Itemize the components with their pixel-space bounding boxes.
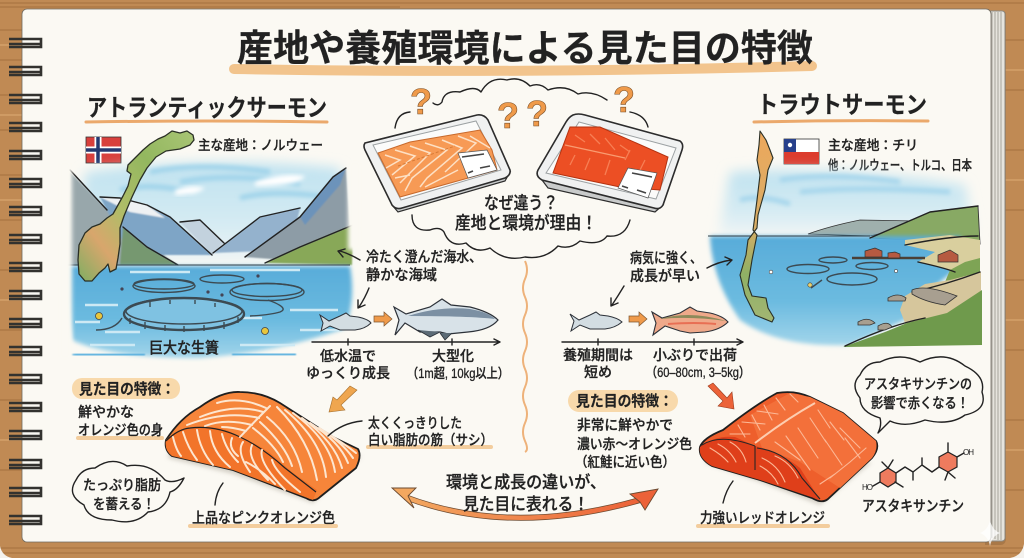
text: slow growth (306, 348, 390, 381)
icon: small salmon (570, 312, 622, 331)
panel: atlantic salmon heading: アトランティックサーモン (87, 95, 327, 122)
text: deep red to orange (575, 417, 692, 470)
text: chile origin: 主な産地：チリ (828, 137, 918, 153)
callout: elegant pink orange (190, 483, 336, 527)
callout: elegant pink orange: 上品なピンクオレンジ色 (192, 509, 335, 527)
text: norway origin: 主な産地：ノルウェー (198, 137, 323, 153)
text: environment and growth: 環境と成長の違いが、 (446, 472, 606, 492)
callout: thick white fat lines (328, 415, 493, 448)
speech bubble: astaxanthin effect: アスタキサンチンの (864, 376, 972, 392)
icon: arrow (629, 312, 647, 326)
diagram: astaxanthin molecule: HO (862, 483, 873, 492)
text: deep red to orange: 濃い赤〜オレンジ色 (577, 436, 692, 452)
rocks (858, 288, 957, 330)
text: why different: なぜ違う？ (484, 193, 558, 213)
speech bubble: astaxanthin effect (855, 357, 983, 433)
diagram: astaxanthin molecule: OH (963, 448, 974, 457)
icon: large salmon (394, 299, 498, 340)
fat stripes: cut face (173, 430, 300, 492)
question marks: ? (613, 79, 635, 120)
text: vivid orange flesh (78, 404, 163, 438)
callout: thick white fat lines: 白い脂肪の筋（サシ） (368, 432, 493, 448)
label: left appearance features: 見た目の特徴： (79, 380, 175, 398)
illustration: atlantic salmon fillet (166, 392, 362, 503)
arrow: orange pointing to fillet (329, 386, 357, 412)
text: vivid orange flesh: 鮮やかな (78, 404, 134, 420)
text: grows large: 大型化 (432, 348, 474, 364)
text: why different (455, 193, 597, 233)
curved double arrow (392, 488, 658, 518)
illustration: trout salmon fillet (700, 392, 877, 505)
panel: trout salmon heading: トラウトサーモン (757, 92, 927, 119)
callout: cold clear seawater: 静かな海域 (366, 266, 437, 284)
wavy divider (523, 261, 527, 452)
label: giant pens: 巨大な生簀 (149, 338, 219, 357)
text: environment and growth (446, 472, 606, 514)
title: 産地や養殖環境による見た目の特徴 (237, 28, 813, 69)
illustration: trout salmon package (537, 114, 683, 212)
pier and buildings (852, 257, 925, 259)
speech bubble: stores lots of fat (72, 461, 184, 522)
text: why different: 産地と環境が理由！ (455, 213, 597, 233)
speech bubble: stores lots of fat: を蓄える！ (93, 496, 155, 512)
callout: powerful red orange: 力強いレッドオレンジ (700, 510, 825, 527)
icon: small salmon (320, 313, 371, 331)
label: right appearance features: 見た目の特徴： (576, 392, 673, 410)
icon: norway flag (86, 137, 121, 163)
illustration: norwegian fjord (58, 160, 362, 360)
callout: disease resistant fast growth (611, 250, 732, 306)
arrow: red pointing to fillet (708, 383, 734, 409)
icon: trout (652, 307, 728, 335)
fat stripes: top surface (187, 400, 270, 437)
illustration: chilean bay (708, 170, 982, 347)
diagram: astaxanthin molecule (862, 443, 974, 492)
fat stripes: right surface (253, 407, 356, 480)
text: slow growth: 低水温で (320, 348, 376, 364)
speech bubble: astaxanthin effect: 影響で赤くなる！ (871, 395, 969, 411)
soft edges (58, 160, 362, 360)
text: chile origin (828, 137, 972, 173)
speech bubble: stores lots of fat: たっぷり脂肪 (83, 477, 161, 493)
sparkle watermark (980, 520, 1000, 546)
growth axis (312, 339, 500, 345)
callout: powerful red orange (698, 481, 828, 527)
text: deep red to orange: 非常に鮮やかで (577, 417, 673, 433)
text: short period (563, 347, 633, 380)
growth diagram: atlantic (306, 299, 509, 381)
map: norway (78, 131, 194, 281)
right shore (905, 235, 980, 270)
thought cloud (395, 79, 648, 258)
text: deep red to orange: （紅鮭に近い色） (575, 454, 675, 470)
icon: chile flag (784, 139, 819, 164)
sea (710, 236, 968, 345)
question marks (410, 79, 635, 136)
text: short period: 短め (584, 364, 612, 380)
callout: cold clear seawater (338, 249, 482, 308)
callout: disease resistant fast growth: 成長が早い (630, 267, 700, 285)
map: chile (740, 131, 774, 322)
text: vivid orange flesh: オレンジ色の身 (78, 422, 163, 438)
question marks: ? (497, 95, 519, 136)
fine stripes (730, 394, 866, 484)
illustration: atlantic salmon package (364, 115, 510, 212)
text: small shipment: 小ぶりで出荷 (653, 347, 737, 363)
text: chile origin: 他：ノルウェー、トルコ、日本 (828, 158, 972, 173)
text: short period: 養殖期間は (563, 347, 633, 363)
callout: disease resistant fast growth: 病気に強く、 (630, 250, 702, 267)
growth diagram: trout (562, 307, 750, 380)
callout: thick white fat lines: 太くくっきりした (368, 415, 462, 431)
text: environment and growth: 見た目に表れる！ (463, 495, 589, 514)
question marks: ? (526, 93, 548, 134)
text: small shipment: （60–80cm, 3–5kg） (646, 365, 750, 380)
spiral binding (9, 39, 41, 524)
growth axis (562, 339, 743, 345)
text: small shipment (646, 347, 750, 380)
icon: arrow (374, 312, 392, 326)
callout: cold clear seawater: 冷たく澄んだ海水、 (366, 249, 482, 266)
fish pens (769, 257, 898, 288)
fish pens (96, 274, 304, 334)
text: slow growth: ゆっくり成長 (306, 365, 390, 381)
text: grows large: （1m超, 10kg以上） (407, 366, 509, 381)
mountains fill (68, 168, 353, 265)
text: grows large (407, 348, 509, 381)
label: astaxanthin: アスタキサンチン (862, 498, 964, 515)
question marks: ? (410, 81, 432, 122)
water (68, 266, 352, 358)
